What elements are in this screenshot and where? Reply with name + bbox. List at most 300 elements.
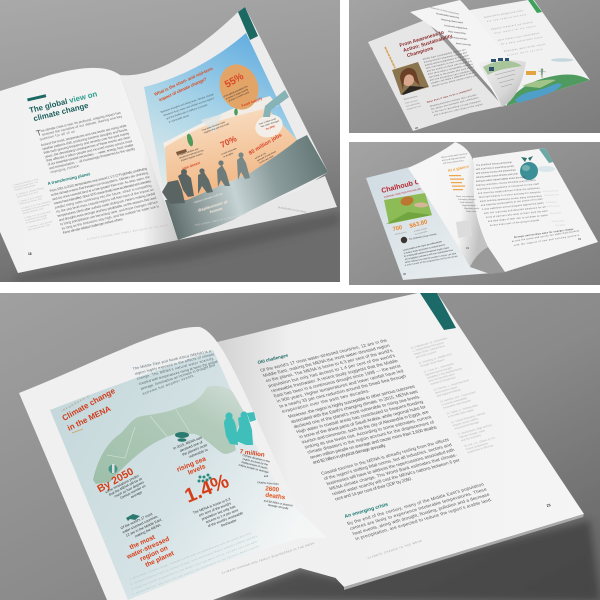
icon: sea waves bbox=[175, 432, 189, 442]
page numbers bbox=[403, 237, 581, 276]
stat: 7 million bbox=[238, 448, 272, 478]
body text: shared across entire sectors every year bbox=[432, 74, 478, 88]
stat: 7 million: Climate disasters in the bbox=[242, 453, 271, 464]
stat: 2600 deaths: and $2 billion in physical bbox=[263, 499, 293, 508]
margin footnotes: 12. Cook, B.I., Anchukaitis bbox=[423, 361, 455, 374]
left body text: to reduce waste and protect our natural spaces bbox=[404, 243, 446, 255]
water label: Over 5 billion could bbox=[259, 117, 277, 126]
stat: the most water-stressed region: 12 are in the Middle East, bbox=[125, 517, 163, 538]
displacement text bbox=[194, 193, 228, 214]
heading: from awareness to action: From Awareness to bbox=[399, 30, 445, 49]
water dry text: Droughts, wildfires and bbox=[177, 147, 200, 157]
left body text: and engaging customers with new sustainable lines bbox=[405, 249, 454, 261]
curled page contents list: Better sourcing bbox=[456, 42, 472, 47]
left body text: The Chalhoub Group commits bbox=[409, 233, 438, 241]
margin footnotes: Spatiotemporal drought bbox=[424, 366, 453, 377]
stat 70%: Crop yields fall when water bbox=[201, 121, 226, 132]
book icon bbox=[176, 149, 187, 155]
margin footnotes: and other sources bbox=[415, 350, 438, 359]
curled page contents list: Community engagement bbox=[444, 24, 468, 30]
right margin notes: from the survey bbox=[547, 204, 560, 208]
water dry text: dryland regions at pace bbox=[180, 152, 204, 162]
stat: 7 million: million people on average bbox=[238, 463, 269, 474]
margin footnotes: Report 2020, Oxford Press bbox=[413, 344, 446, 356]
stat: rising sea levels: declared one of bbox=[179, 440, 203, 453]
fold shadow bbox=[470, 247, 505, 274]
body text: as long as the emissions stay high, and the outlook for water use is bbox=[61, 204, 160, 231]
margin footnotes: Journal of Geophysics bbox=[429, 375, 457, 386]
curled dark icons bbox=[489, 58, 509, 71]
side notes: commitment as a gauge bbox=[25, 214, 48, 222]
left page footer: CLIMATE CHANGE AND FAMILY BUSINESSES IN THE MENA bbox=[221, 541, 315, 575]
page numbers: 31 bbox=[466, 246, 469, 250]
intro paragraph: change. The MENA's natural water scarcity, bbox=[136, 356, 215, 381]
caption under portrait: and sustainability bbox=[406, 102, 420, 108]
stat 55%: 55% bbox=[223, 71, 246, 91]
page number: 28 bbox=[415, 126, 418, 130]
body paragraph two: in some of the driest parts of Saudi Arabia, while regional hubs for bbox=[298, 404, 427, 439]
icon: thermometer bbox=[108, 464, 118, 474]
body text: What does it take to be a champion? bbox=[426, 88, 473, 104]
margin footnotes: 16. Oxford Research, Climate bbox=[450, 411, 487, 424]
body paragraph four: By the end of the century, many of the Middle East's population bbox=[346, 482, 485, 526]
body paragraph two: and $2 billion in physical damage annually. bbox=[312, 443, 387, 465]
curled page contents list: Sustainability leadership bbox=[436, 12, 460, 20]
body paragraph one: in 900 years. Higher temperatures and lower rainfall have led bbox=[275, 368, 405, 404]
stat: the most water-stressed region: region on bbox=[139, 545, 169, 563]
side notes: Climate Change 2021: The bbox=[13, 180, 39, 189]
side notes: Physical Science Basis bbox=[14, 185, 36, 192]
heading: from awareness to action bbox=[399, 28, 455, 60]
subheading: an emerging crisis: An emerging crisis bbox=[344, 502, 389, 520]
curled page orange heading: At a glance bbox=[447, 163, 470, 173]
stat: 7 million: region account for the bbox=[242, 457, 269, 467]
body text: is the key to becoming a local champion bbox=[432, 100, 482, 114]
body paragraph two bbox=[287, 384, 441, 465]
margin footnotes: J., Global Water Resources bbox=[411, 340, 445, 353]
curled page text bbox=[441, 152, 479, 213]
white callout circle bbox=[255, 114, 283, 138]
margin footnotes: impacts across MENA bbox=[452, 417, 479, 427]
infographic intro: Between droughts and rising seas, climate change bbox=[160, 93, 215, 114]
body paragraph one: on the planet. The MENA is home to 6.3 per cent of the world's bbox=[265, 348, 394, 383]
side notes: 4. Fischer, E. M. et al, Increasing bbox=[21, 200, 52, 210]
side notes: and sea level rise, 2016 bbox=[28, 223, 51, 231]
intro text: years, the devastating consequences of these events are clear: bbox=[44, 135, 131, 159]
left page bbox=[19, 327, 343, 600]
intro text: T bbox=[35, 128, 43, 138]
stat $63.80: $63.80 bbox=[409, 219, 429, 230]
side notes: probability of record-shattering bbox=[21, 203, 50, 213]
intro text: With both growing frequency and severity over the past twenty bbox=[43, 131, 130, 155]
stat 80 million jobs: because of heat stress bbox=[257, 150, 277, 162]
side notes: for climate policy, 2018 bbox=[26, 216, 48, 225]
body paragraph two: High water in coastal areas has contributed to frequent flooding bbox=[295, 399, 424, 434]
intro text: of our essential societal necessities — water, energy, food, shelter bbox=[47, 143, 135, 166]
body paragraph four: centres are likely to experience intolerable temperatures. These bbox=[349, 487, 488, 531]
right margin notes: Sources and notes bbox=[543, 189, 558, 193]
right page edge bbox=[344, 514, 584, 590]
stat: 2600 deaths: deaths bbox=[265, 492, 286, 501]
stat: the most water-stressed region: Of the world's 17 most bbox=[120, 512, 153, 530]
body text: and the stories of those who lead in this bbox=[427, 59, 473, 73]
stat: by 2050: some simulations predict bbox=[104, 474, 140, 494]
body paragraph three: of the region's shifting tidal norms, but all industries, sectors and bbox=[323, 442, 453, 481]
side notes: 1. Masson-Delmotte, V. et al, bbox=[12, 178, 40, 187]
curled green hill bbox=[483, 61, 522, 75]
stat: by 2050: Celsius warmer on bbox=[119, 484, 146, 500]
intro text: Around the world, temperatures and sea levels are rising while bbox=[40, 124, 127, 147]
right page text block: and keeping sustainability at the centre of its plan bbox=[481, 197, 544, 207]
caption under portrait: Name Surname bbox=[404, 96, 418, 101]
side notes: influence on trends, 2007 bbox=[19, 197, 43, 206]
left page bbox=[368, 20, 503, 131]
water label bbox=[258, 118, 280, 130]
right page bbox=[217, 293, 584, 587]
body paragraph three: cent and 14 per cent of their GDP by 2050. bbox=[334, 476, 413, 501]
right page text bbox=[484, 9, 546, 57]
teal tab bbox=[420, 293, 456, 330]
teal tab bbox=[539, 148, 553, 163]
body text: temperatures climb after surface water drying out. Heat is making rainfall bbox=[57, 192, 156, 218]
body paragraph two: associated with the Earth's changing climate. In 2015, MENA was bbox=[290, 389, 419, 424]
curled page text: Staff initiatives bbox=[460, 201, 473, 204]
body paragraph two: sinking as sea levels rise. According to some estimates, current bbox=[303, 414, 433, 450]
body text: the whole environment and community bbox=[431, 96, 480, 111]
caption under portrait bbox=[404, 96, 421, 111]
stat: 1.4%: access to 1.4 per cent bbox=[205, 508, 239, 524]
stat: the most water-stressed region: water-stressed bbox=[125, 536, 171, 561]
body paragraph three: businesses will have to address the repercussions associated with bbox=[326, 447, 456, 486]
stat 80 million jobs: 80 million jobs bbox=[248, 132, 283, 157]
right page text block: aiming to restore natural habitats across the region bbox=[476, 176, 527, 183]
faucet icon bbox=[263, 90, 289, 117]
body text: these climate-related challenges before others. bbox=[62, 217, 124, 235]
right page text: Sustainability pledges and action bbox=[484, 9, 524, 19]
infographic intro: and the livelihoods of millions of people bbox=[166, 103, 208, 121]
margin footnotes: and regional findings bbox=[436, 387, 462, 398]
left page bbox=[366, 167, 505, 280]
body paragraph two: tourism and commerce, such as the city of Alexandria in Egypt, are bbox=[301, 409, 430, 444]
margin footnotes: projections in SW Asia bbox=[466, 443, 495, 454]
intro text bbox=[35, 109, 138, 174]
body text: can bring to the people who work with it bbox=[429, 66, 474, 79]
left body text: by working with partners throughout supply chains bbox=[404, 246, 450, 258]
gold rule bbox=[72, 429, 83, 433]
right page text block: while building awareness across many communities bbox=[480, 195, 543, 203]
subheading: old challenges: Old challenges bbox=[257, 352, 289, 365]
body paragraph one: population but only has access to 1.4 per cent of the world's bbox=[267, 353, 397, 388]
MENA map bbox=[93, 386, 247, 484]
margin footnotes: Drought 2019 Report bbox=[419, 358, 446, 368]
side notes: 5. Clark, P. U. et al, Sea-level bbox=[24, 210, 52, 220]
caption under portrait: Chief executive bbox=[405, 99, 418, 105]
stat captions: of sales through bbox=[414, 227, 427, 233]
right margin notes: See the website bbox=[557, 231, 570, 235]
panel: Chalhoub spread bbox=[349, 142, 600, 285]
curled page text: Reporting results bbox=[464, 207, 479, 210]
body text: moving beyond awareness raising and bbox=[424, 51, 468, 64]
margin footnotes: 11. Hoerling, M., Middle East bbox=[418, 352, 453, 365]
stat: 1.4%: The MENA is home to 6.3 bbox=[192, 497, 231, 515]
right page text block: helping customers choose ethically sourced items bbox=[476, 179, 537, 187]
stat: the most water-stressed region: the most bbox=[129, 534, 157, 551]
margin footnotes: over the last 900 years bbox=[428, 372, 456, 383]
right margin notes bbox=[543, 189, 570, 235]
body text: waves have intensified. Since 1970 ocean levels have accelerated and scientists bbox=[53, 179, 152, 205]
right page text block: with local firms is expanding quickly bbox=[476, 165, 515, 171]
right page text block: and take steps of their own to cut down on waste bbox=[488, 214, 549, 223]
margin footnotes: variability in the Mediterranean bbox=[426, 366, 463, 380]
right page text block: across the group and across the wider Gulf markets bbox=[512, 229, 580, 243]
stat 80 million jobs: by the year 2030 bbox=[259, 154, 275, 164]
stat: rising sea levels bbox=[173, 435, 210, 480]
curled page bbox=[408, 142, 488, 267]
curled lines bbox=[495, 70, 515, 87]
stat: 1.4%: per cent of the world's bbox=[198, 501, 232, 517]
water label: by 2050 bbox=[265, 124, 276, 131]
curled page contents list: Water stewardship bbox=[448, 30, 467, 35]
body text: Leaders can make a difference in what is bbox=[431, 70, 478, 85]
stat: the most water-stressed region bbox=[120, 509, 177, 575]
curled page text: Packaging changes bbox=[458, 199, 475, 201]
logo icon bbox=[401, 237, 407, 243]
stat: 7 million: and bbox=[264, 474, 269, 478]
stat: rising sea levels: In 2015, MENA was bbox=[173, 435, 203, 451]
intro text: entered the narrative of our debate, leaving one key bbox=[42, 114, 123, 137]
stat: by 2050 bbox=[95, 465, 149, 509]
infographic sand bbox=[165, 108, 297, 203]
right page bbox=[460, 148, 598, 272]
stat: 1.4%: freshwater bbox=[221, 518, 238, 528]
margin footnotes: 18. Pal, J.S., Eltahir, E.A.B. bbox=[463, 436, 497, 448]
stat: rising sea levels: rising sea bbox=[176, 455, 207, 474]
stat 700: 700 bbox=[392, 225, 403, 233]
right page text block: across every part of the group's brands. bbox=[490, 219, 540, 227]
heading: the global view on climate change: The global view on bbox=[28, 89, 98, 115]
right margin notes: Further reading bbox=[552, 219, 564, 223]
body paragraph two: climate disasters in the region account for the displacement of bbox=[306, 419, 436, 455]
water dry text: sandstorms spread across bbox=[179, 149, 205, 160]
side notes: 6. Hansen, J. et al, Ice melt bbox=[27, 220, 53, 229]
body paragraph four bbox=[346, 482, 493, 541]
stat 55% caption: at least a month a year bbox=[228, 91, 250, 103]
body text: to the climate events that threaten our ecosystems. Glaciers are shrinking, bbox=[50, 171, 149, 197]
stat: rising sea levels: vulnerable to bbox=[188, 448, 208, 459]
heading: from awareness to action: Action: Sustainability bbox=[402, 33, 453, 54]
body text bbox=[423, 48, 484, 117]
infographic label: INFOGRAPHIC bbox=[61, 394, 91, 413]
tornado icon bbox=[201, 114, 222, 133]
curled page contents list: Reducing plastic waste bbox=[441, 18, 464, 25]
right page text block: it also publishes annual progress against the goals bbox=[482, 201, 545, 211]
heading: Chalhoub Group: Chalhoub Gr bbox=[381, 178, 424, 195]
intro paragraph: coupled with temperatures rising at twice the global bbox=[138, 359, 218, 386]
body paragraph three: related water scarcity will cost the MENA's nations between 6 per bbox=[331, 457, 461, 496]
right page text: for a more sustainable future bbox=[501, 36, 543, 46]
stat: 1.4%: 1.4% bbox=[182, 470, 232, 508]
footnotes: 3. Regional climate projections for the Middle East and North Africa: extreme heat and water bbox=[131, 540, 259, 591]
body text: and droughts even stronger and less predictable, so the seasons that used bbox=[58, 196, 157, 222]
margin footnotes: 13. Gertner, J., Dead Sea level bbox=[432, 378, 470, 392]
infographic intro: in vulnerable areas bbox=[169, 114, 190, 124]
body text: putting action programmes in the region bbox=[425, 54, 470, 67]
stat: the most water-stressed region: water-stressed countries, bbox=[122, 514, 159, 534]
right margin notes: Annual report 2021 bbox=[544, 193, 559, 197]
page number 18: 18 bbox=[28, 252, 32, 256]
right page text block: developing a programme of initiatives for the staff bbox=[477, 183, 539, 191]
panel: global view spread bbox=[0, 0, 340, 282]
body text: predict rising rates continuing into the future, which is compelling. bbox=[54, 183, 153, 210]
infographic intro: threatens food, water and shelter across regions bbox=[163, 97, 215, 117]
infographic sky bbox=[144, 33, 297, 200]
horizon band bbox=[163, 96, 278, 150]
right page text block: with the support of new and existing partners bbox=[514, 234, 580, 247]
right page text block: sorts of partners who want to learn from the work bbox=[486, 209, 549, 219]
right page footer: CLIMATE CHANGE IN THE MENA bbox=[367, 538, 423, 560]
body paragraph four: in precipitation, are expected to reduce the region's arable land. bbox=[354, 497, 493, 541]
icon: water tap bbox=[126, 514, 140, 521]
body paragraph one: Of the world's 17 most water-stressed countries, 12 are in the bbox=[259, 338, 388, 373]
margin footnotes: Climate change, water bbox=[458, 428, 486, 439]
right page text: clear results for the region bbox=[494, 25, 536, 35]
right page text: are now shaping business bbox=[487, 13, 527, 23]
right margin notes: Case studies bbox=[555, 223, 566, 227]
stat 70%: supplies drop and soils erode bbox=[203, 122, 231, 134]
intro paragraph: average, foreshadow an increase in drought and bbox=[140, 363, 215, 391]
ground and gray band bbox=[165, 135, 328, 240]
stat: by 2050: that the MENA will be as bbox=[108, 476, 143, 497]
stat 70%: 70% bbox=[218, 133, 239, 150]
left footer: CLIMATE CHANGE AND FAMILY BUSINESS IN THE MENA bbox=[87, 224, 169, 241]
margin footnotes: 14. Hereher, M.E., Assessment bbox=[439, 390, 477, 404]
lower right page bbox=[178, 176, 337, 240]
intro text: he climate crisis is real. Its profound, ongoing impact has bbox=[40, 111, 122, 133]
teal tab bbox=[238, 7, 258, 40]
stat 80 million jobs: will be at risk bbox=[254, 152, 267, 160]
body text: with real impacts in their communities bbox=[426, 57, 471, 70]
stat 70% bbox=[202, 122, 237, 158]
subheading: WORKING TOGETHER FOR NATURE bbox=[384, 187, 422, 199]
stat: 2600 deaths bbox=[257, 480, 293, 510]
water label: face water shortages bbox=[260, 119, 280, 128]
left body text: while making sure that the people in stores can take bbox=[405, 252, 457, 264]
body text: Shaping business models that consider bbox=[430, 93, 477, 108]
body text: Middle East sustainability leaders are bbox=[423, 48, 467, 61]
stat 55% caption: in areas of water scarcity bbox=[225, 88, 250, 101]
stat: by 2050: much as four degrees bbox=[114, 480, 145, 499]
curled page text: Water use programs bbox=[456, 195, 474, 198]
intro paragraph bbox=[132, 349, 218, 396]
plant icons bbox=[186, 108, 238, 147]
left page bbox=[0, 68, 178, 273]
curled page text: Nature conservation and more bbox=[441, 152, 469, 159]
stat: 2600 deaths: 2600 bbox=[265, 485, 280, 494]
body paragraph two: declared one of the planet's most vulnerable to rising sea levels. bbox=[293, 394, 421, 429]
body text: As the sea level rises coastal regions will feel most of the impact as bbox=[56, 187, 155, 214]
cloud bbox=[551, 58, 573, 62]
intro paragraph: region highly exposed to the effects of climate bbox=[134, 352, 215, 376]
page number 23: 23 bbox=[546, 503, 551, 508]
left body text: a role in each of the programmes led by the group. bbox=[405, 255, 459, 267]
curled page footnote bbox=[456, 220, 472, 238]
stat: 1.4% bbox=[182, 470, 245, 536]
page numbers: 30 bbox=[403, 272, 406, 276]
footnotes: 2. Intergovernmental Panel on Climate Change, Sixth Assessment Report summary chapter and data bbox=[130, 534, 258, 586]
right page bbox=[120, 7, 328, 240]
body text: to bring precipitation are becoming rarer, and those changes will last bbox=[60, 200, 158, 226]
right page text: More leaders sign commitments bbox=[498, 32, 540, 42]
stat: 1.4%: population but only has bbox=[201, 504, 236, 521]
stat 70%: to droughts bbox=[223, 152, 234, 158]
panel: climate change in the MENA spread bbox=[0, 293, 600, 600]
side notes: 2. Lindsey, R., Climate Change bbox=[16, 186, 45, 196]
right page text block: reducing waste across all stores each year bbox=[476, 172, 518, 179]
silhouettes of migrating people bbox=[162, 152, 250, 204]
right page bbox=[440, 0, 590, 106]
stat: 7 million: 7 million bbox=[239, 448, 265, 459]
curled page orange heading bbox=[447, 163, 470, 190]
margin footnotes: Future temperature bbox=[465, 441, 489, 451]
landscape illustration bbox=[506, 74, 590, 106]
body text bbox=[49, 167, 161, 235]
right page text block: Stronger partnerships make for stronger change bbox=[514, 228, 574, 239]
heading: climate change in the MENA: Climate change bbox=[61, 386, 117, 423]
margin footnotes: 17. World Bank, High and Dry bbox=[457, 423, 493, 436]
water dry text bbox=[177, 148, 204, 170]
billboard icon bbox=[526, 71, 536, 75]
right page text: across more sectors bbox=[507, 48, 543, 57]
body paragraph two: seven million people on average and cause more than 2,600 deaths bbox=[309, 425, 438, 460]
intro text: changing climate. bbox=[50, 164, 80, 174]
infographic intro bbox=[160, 94, 214, 123]
left body text bbox=[403, 233, 459, 267]
margin footnotes: of coastal vulnerability bbox=[441, 396, 468, 407]
side notes: Global Sea Level, 2021 bbox=[17, 192, 39, 199]
body paragraph three: MENA climate change. The World Bank estimates that climate- bbox=[328, 452, 458, 491]
margin footnotes: 10. Falkenmark, M., Rockström, bbox=[410, 336, 448, 350]
green tab bbox=[528, 0, 542, 13]
lower right page footer: BUSINESSES IN THE MENA bbox=[278, 206, 307, 214]
stat: 1.4%: of the world's renewable bbox=[207, 511, 244, 528]
stat: 7 million: displacement of seven bbox=[241, 460, 268, 470]
intro text: question for all of us bbox=[39, 129, 76, 141]
right page text block: with full reporting and detailed measures for all bbox=[484, 205, 546, 215]
stat: the most water-stressed region: the planet bbox=[144, 550, 176, 569]
butterfly photo bbox=[384, 193, 432, 224]
teal people bbox=[224, 412, 256, 445]
curled page text: Wider plans bbox=[466, 211, 477, 213]
curled page text: with many partner firms bbox=[443, 159, 464, 165]
body paragraph one: Middle East, making the MENA the most water-stressed region bbox=[262, 343, 391, 378]
margin footnotes: 15. Gaber, A., Sinking cities bbox=[445, 403, 479, 415]
side notes bbox=[12, 178, 52, 230]
body paragraph one bbox=[259, 338, 410, 414]
body paragraph two: Moreover, the region is highly susceptible to other serious outcomes bbox=[287, 384, 417, 419]
stat 55% caption: of the global population live bbox=[223, 85, 249, 98]
body paragraph three bbox=[320, 437, 464, 501]
heading: climate change in the MENA: in the MENA bbox=[66, 404, 112, 433]
stat captions bbox=[395, 227, 428, 236]
stat: by 2050: By 2050 bbox=[95, 465, 136, 495]
curled page text: across all regional markets bbox=[442, 156, 466, 162]
stat: 2600 deaths: damage annually bbox=[268, 503, 289, 510]
displacement text: displacement of bbox=[197, 199, 229, 213]
curled page text: Regional impact bbox=[462, 204, 477, 207]
curled page contents list: Awareness to Action programmes bbox=[430, 6, 460, 16]
displacement text: Millions of people could see bbox=[194, 192, 224, 204]
curled page contents list: Energy savings bbox=[452, 37, 468, 41]
